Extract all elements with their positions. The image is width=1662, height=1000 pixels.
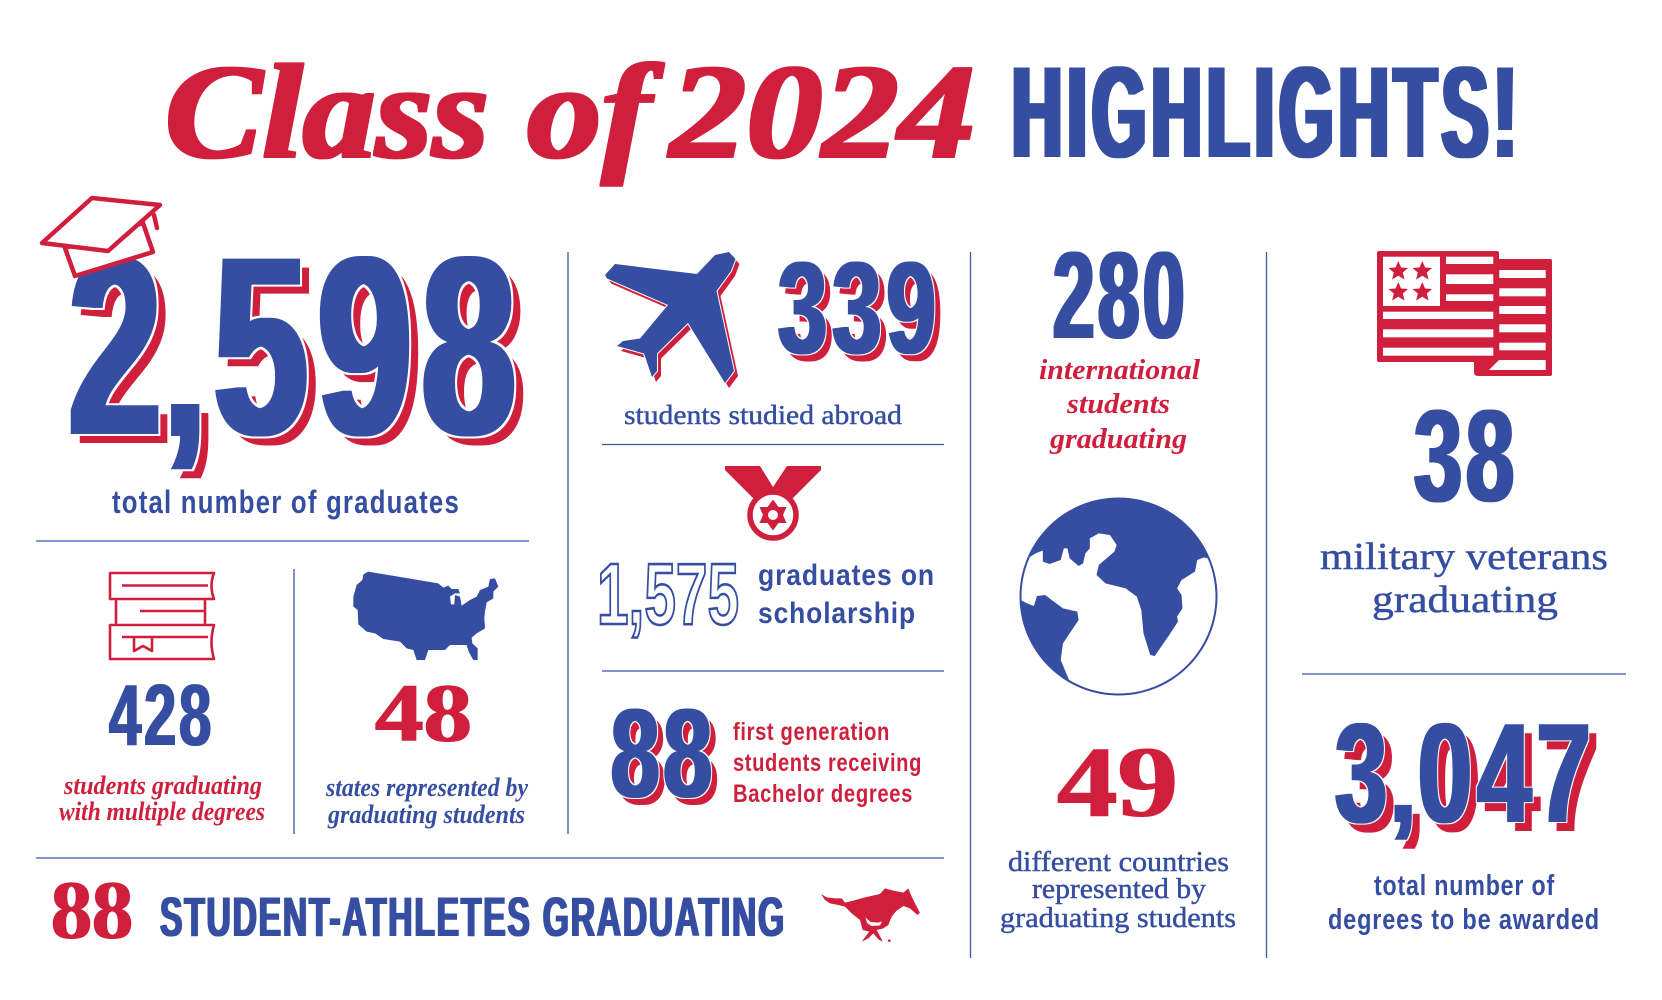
- icon: USA map: [353, 572, 498, 660]
- icon: stack of books: [110, 573, 214, 659]
- title: Class of 2024: [165, 38, 975, 187]
- label: first generation students receiving Bachelor degrees: [733, 718, 922, 808]
- panel: multiple degrees: [59, 573, 265, 826]
- title: [165, 38, 1522, 187]
- label: military veterans graduating: military veterans: [1320, 536, 1608, 578]
- title: Class of 2024: of: [527, 38, 664, 187]
- panel: states represented: [325, 572, 528, 829]
- label: total number of degrees to be awarded: [1328, 870, 1600, 936]
- icon: mustang: [821, 888, 920, 942]
- number: 2,598: 598: [214, 204, 526, 489]
- label: different countries represented by graduating students: [1000, 847, 1236, 934]
- number: 428: 428: [109, 667, 214, 764]
- title: Class of 2024: 2024: [668, 38, 975, 187]
- icon: medal: [725, 466, 821, 538]
- label: states represented by graduating students: [325, 773, 528, 829]
- label: states represented by graduating students: graduating students: [327, 800, 525, 829]
- label: different countries represented by graduating students: graduating students: [1000, 903, 1236, 934]
- panel: studied abroad: [605, 234, 941, 430]
- panel: countries: [1000, 498, 1238, 934]
- label: military veterans graduating: graduating: [1372, 579, 1558, 621]
- label: military veterans graduating: [1320, 536, 1608, 621]
- label: total number of graduates: total number of graduates: [112, 484, 460, 520]
- label: states represented by graduating students: states represented by: [325, 773, 528, 802]
- icon: graduation cap: [42, 198, 160, 276]
- label: international students graduating: graduating: [1049, 424, 1187, 455]
- number: 339: 339: [778, 234, 941, 381]
- number: 38: 38: [1414, 382, 1518, 529]
- label: different countries represented by graduating students: different countries: [1008, 847, 1229, 878]
- icon: American flag: [1377, 251, 1552, 376]
- number: 88: 88: [611, 683, 716, 824]
- label: graduates on scholarship: scholarship: [758, 597, 916, 630]
- panel: military veterans: [1320, 251, 1608, 621]
- title: Class of 2024: Class: [165, 38, 489, 187]
- number: 48: 48: [375, 667, 472, 760]
- label: students graduating with multiple degrees: [59, 771, 265, 826]
- label: first generation students receiving Bachelor degrees: students receiving: [733, 749, 922, 777]
- label: first generation students receiving Bachelor degrees: first generation: [733, 718, 890, 746]
- number: 49: 49: [1057, 726, 1178, 839]
- label: first generation students receiving Bachelor degrees: Bachelor degrees: [733, 780, 913, 808]
- number: 2,598: ,: [165, 241, 205, 482]
- label: students graduating with multiple degrees: with multiple degrees: [59, 797, 265, 826]
- label: students studied abroad: students studied abroad: [624, 400, 903, 430]
- number: 88: 88: [51, 864, 133, 957]
- number: 1,575: 1,575: [597, 546, 739, 643]
- panel: total graduates: [42, 198, 526, 520]
- panel: degrees awarded: [1328, 694, 1600, 936]
- number: 2,598: 2: [69, 204, 161, 489]
- icon: globe: [1020, 498, 1218, 696]
- label: international students graduating: international: [1039, 355, 1200, 386]
- panel: international students: [1039, 228, 1200, 455]
- label: graduates on scholarship: graduates on: [758, 559, 935, 592]
- icon: airplane: [605, 252, 740, 388]
- label: STUDENT-ATHLETES GRADUATING: STUDENT-ATHLETES GRADUATING: [160, 885, 786, 948]
- label: graduates on scholarship: [758, 559, 935, 630]
- panel: student-athletes: [51, 864, 920, 957]
- number: 280: 280: [1053, 228, 1188, 365]
- label: international students graduating: [1039, 355, 1200, 455]
- panel: first generation: [611, 683, 922, 824]
- label: international students graduating: students: [1066, 389, 1170, 420]
- label: total number of degrees to be awarded: degrees to be awarded: [1328, 904, 1600, 936]
- number: 2,598: [69, 204, 526, 489]
- number: 3,047: ,: [1390, 719, 1416, 847]
- panel: scholarship: [597, 466, 935, 643]
- label: students graduating with multiple degrees: students graduating: [63, 771, 262, 800]
- number: 3,047: 3: [1335, 694, 1387, 853]
- label: different countries represented by graduating students: represented by: [1032, 874, 1206, 905]
- label: total number of degrees to be awarded: total number of: [1374, 870, 1555, 902]
- number: 3,047: [1335, 694, 1596, 853]
